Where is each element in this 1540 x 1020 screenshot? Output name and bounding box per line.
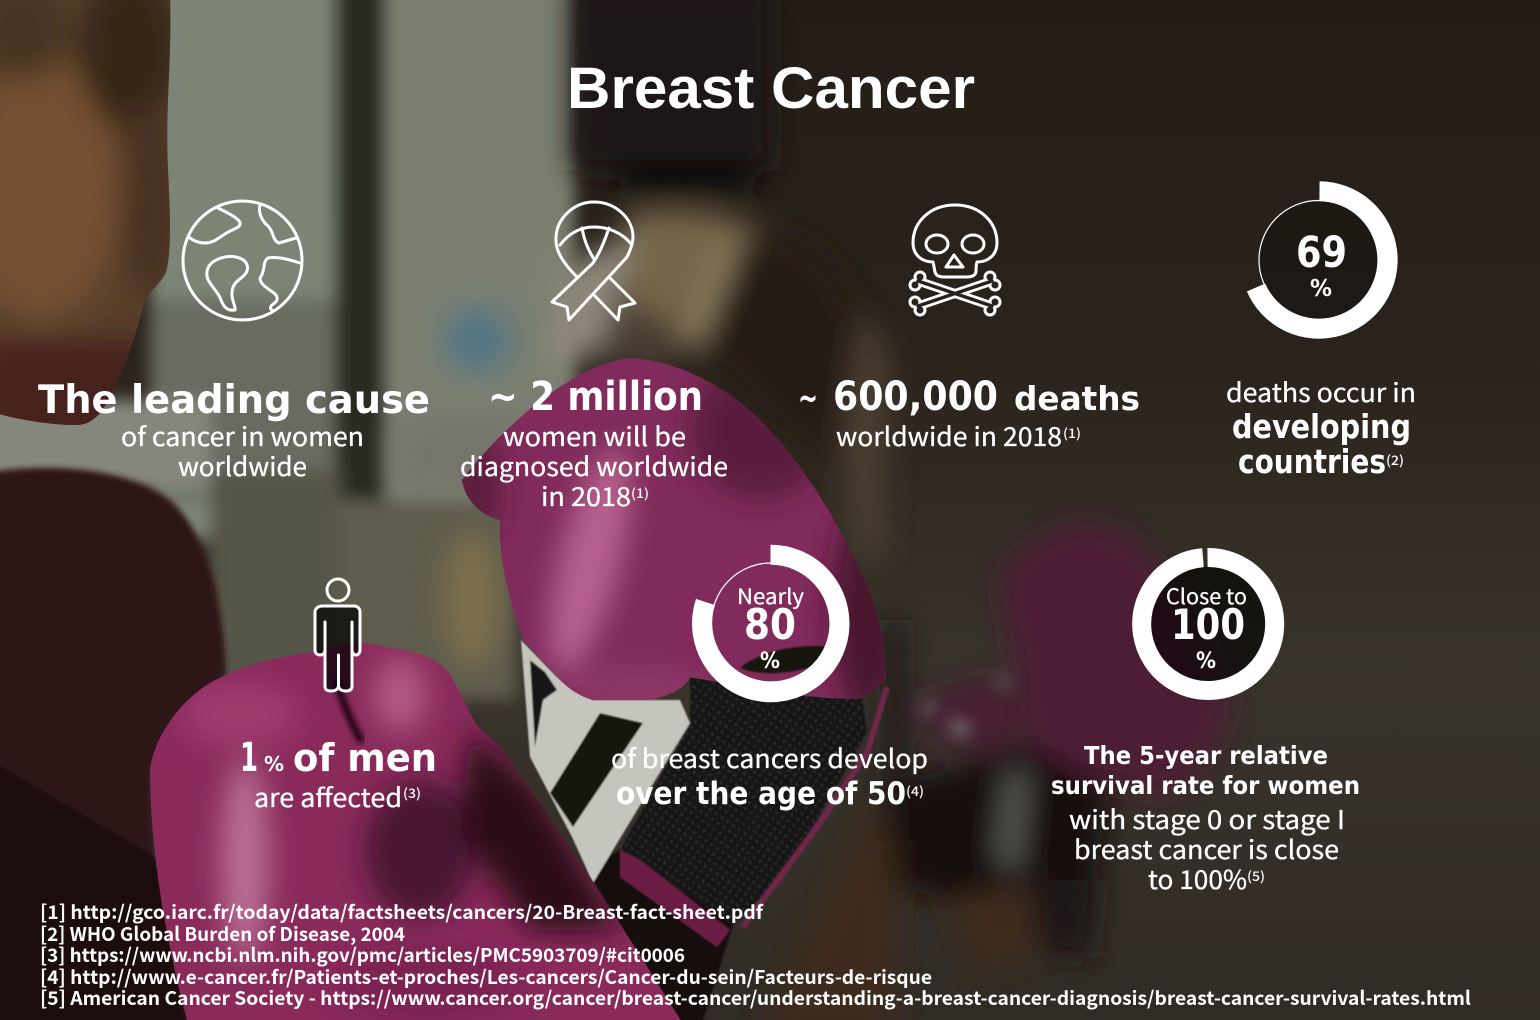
heading: developing countries — [1232, 407, 1411, 481]
glove seam in ring — [740, 646, 845, 673]
heading: 600,000 deaths: deaths — [1014, 379, 1140, 418]
text: women will be diagnosed: women will be — [503, 417, 686, 454]
text: women will be diagnosed: diagnosed worldwide — [460, 447, 728, 484]
text: of breast cancers develop: of breast cancers develop — [611, 739, 928, 776]
value: percent sign: % — [1310, 276, 1332, 302]
heading: developing countries: countries — [1238, 442, 1386, 481]
centre glove cuff — [521, 640, 887, 1020]
heading: 1% of men — [240, 735, 437, 781]
value: 80: 80 — [744, 600, 796, 649]
panel: leading cause — [38, 201, 430, 484]
panel: nearly 80 percent — [611, 555, 928, 812]
value: 100: 100 — [1171, 600, 1245, 649]
heading: over the age of 50: over the age of 50 — [616, 776, 906, 812]
icon: man — [315, 579, 360, 691]
label: close to: Close to — [1166, 581, 1247, 611]
heading: 1% of men: % — [264, 752, 284, 776]
panel: close to 100 percent — [1051, 557, 1360, 897]
ring: 69% — [1256, 191, 1388, 329]
front glove — [150, 642, 681, 1020]
heading: 1% of men: 1 — [240, 735, 258, 781]
references: [3] https://www.ncbi.nlm.nih.gov/pmc/articles/PMC5903709/#cit0006 — [40, 941, 685, 968]
heading: 5-year relative survival: The 5-year relative — [1084, 741, 1328, 770]
references: [5] American Cancer Society - https://www.cancer.org/cancer/breast-cancer/understanding-a-breast-cancer-diagnosis/breast-cancer-survival-rates.html — [40, 984, 1471, 1011]
text: with stage 0 or stage I — [1069, 800, 1345, 897]
text: of cancer in women worldwide: worldwide — [178, 447, 307, 484]
text: worldwide in 2018: (1) — [1063, 423, 1081, 442]
panel: 600,000 deaths — [798, 205, 1140, 454]
title: Breast Cancer — [567, 56, 975, 121]
references: [1] http://gco.iarc.fr/today/data/factsheets/cancers/20-Breast-fact-sheet.pdf — [40, 898, 764, 925]
heading: developing countries: (2) — [1386, 450, 1404, 469]
text: women will be diagnosed: (1) — [631, 483, 649, 502]
text: are affected: (3) — [403, 783, 421, 802]
text: of cancer in women worldwide — [121, 417, 364, 484]
woman shoulder — [0, 468, 226, 1020]
distant figure — [545, 0, 890, 560]
centre glove — [462, 358, 886, 700]
heading: 600,000 deaths: 600,000 — [833, 374, 998, 420]
icon: skull and crossbones — [908, 205, 1002, 316]
icon: ribbon — [552, 202, 635, 320]
panel: 69 percent — [1226, 191, 1416, 481]
text: with stage 0 or stage I: breast cancer is close — [1074, 830, 1339, 867]
label: nearly: Nearly — [737, 581, 804, 611]
icon: globe — [183, 201, 302, 320]
heading: developing countries: developing — [1232, 407, 1411, 446]
text: women will be diagnosed: in 2018 — [541, 477, 631, 514]
value: 69: 69 — [1296, 228, 1347, 278]
heading: 5-year relative survival: survival rate for women — [1051, 771, 1360, 800]
text: with stage 0 or stage I: to 100% — [1148, 860, 1247, 897]
heading: 600,000 deaths — [798, 374, 1140, 420]
text: worldwide in 2018: worldwide in 2018 — [836, 417, 1062, 454]
text: deaths occur in: deaths occur in — [1226, 373, 1416, 410]
text: women will be diagnosed — [460, 417, 728, 514]
heading: over the age of 50: (4) — [906, 781, 924, 800]
heading: 600,000 deaths: ~ — [798, 378, 818, 419]
references: [4] http://www.e-cancer.fr/Patients-et-proches/Les-cancers/Cancer-du-sein/Facteurs-de-risque — [40, 963, 932, 990]
woman hair — [0, 0, 170, 425]
heading: 1% of men: of men — [293, 736, 437, 780]
ring: 80% — [702, 555, 839, 692]
value: percent sign: % — [760, 649, 780, 674]
text: with stage 0 or stage I: (5) — [1247, 866, 1265, 885]
references: [2] WHO Global Burden of Disease, 2004 — [40, 920, 405, 947]
text: are affected: are affected — [254, 778, 402, 815]
far gloves and cuff — [760, 523, 1232, 1020]
references — [40, 898, 1471, 1011]
value: percent sign: % — [1196, 649, 1216, 674]
text: of cancer in women worldwide: of cancer in women — [121, 417, 364, 454]
heading: 5-year relative survival — [1051, 741, 1360, 800]
panel: 1% of men — [240, 579, 437, 815]
ring: 100% — [1142, 557, 1275, 690]
heading: 2 million: ~ 2 million — [488, 374, 703, 420]
heading: the leading cause: The leading cause — [38, 378, 430, 423]
panel: 2 million — [460, 202, 728, 514]
window with pillar — [0, 0, 575, 700]
text: with stage 0 or stage I: with stage 0 or stage I — [1069, 800, 1345, 837]
